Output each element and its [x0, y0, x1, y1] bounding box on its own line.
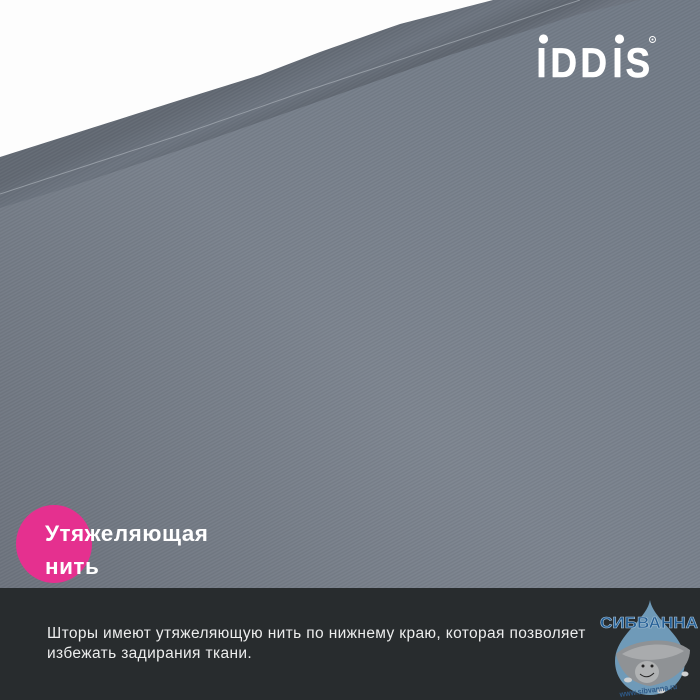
website: www.sibvanna.ru [618, 682, 678, 699]
stitching line [0, 0, 580, 194]
heading: Утяжеляющая [45, 521, 208, 546]
description text [47, 625, 586, 662]
pink accent circle [16, 505, 92, 583]
heading [45, 521, 208, 579]
heading: нить [45, 554, 99, 579]
bathtub [616, 640, 690, 694]
description text: избежать задирания ткани. [47, 645, 252, 662]
bottom text panel [0, 588, 700, 700]
water drop [615, 600, 685, 695]
brand name: СИБВАННА [600, 615, 698, 632]
logo: iDDiS: IDDIS [536, 40, 650, 87]
weighted hem band [0, 0, 640, 208]
description text: Шторы имеют утяжеляющую нить по нижнему краю, которая позволяет [47, 625, 586, 642]
white background above the curtain [0, 0, 493, 157]
